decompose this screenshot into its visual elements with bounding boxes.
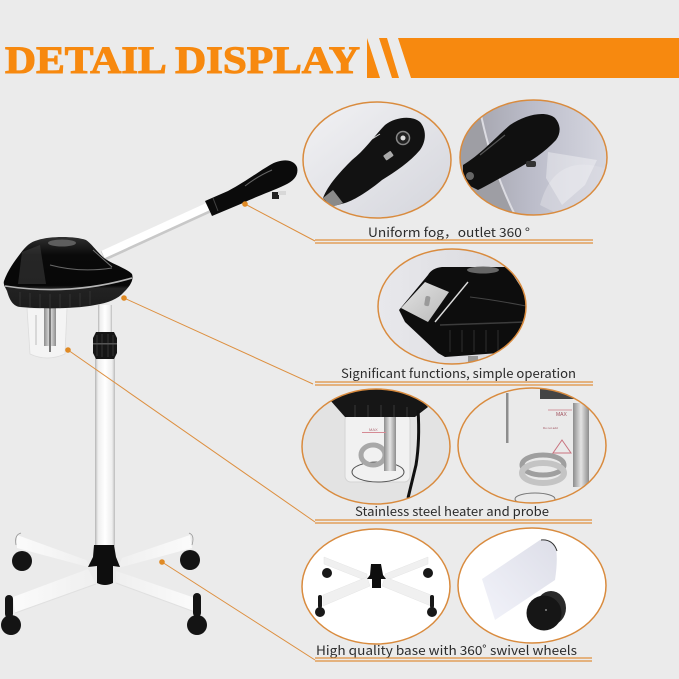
- detail: heater coil close-up: [458, 388, 606, 505]
- detail: rolling base: [302, 529, 450, 644]
- header stripes and bar: [367, 38, 679, 78]
- detail: swivel wheel: [458, 528, 606, 643]
- detail: heater coil close-up: MAX: [556, 412, 568, 418]
- caption underline: heater: [315, 520, 592, 523]
- leader lines and dots: [65, 201, 315, 660]
- detail: control panel close-up: [378, 249, 526, 364]
- caption: functions: Significant functions, simple operation: [341, 363, 576, 382]
- title: DETAIL DISPLAY: [5, 39, 360, 82]
- lower pole: [95, 356, 115, 546]
- caption: fog outlet: Uniform fog，outlet 360 °: [368, 222, 530, 241]
- caption underline: functions: [315, 382, 593, 385]
- caption underline: base and wheels: [315, 658, 592, 661]
- steam arm: [103, 206, 208, 256]
- header: [5, 38, 679, 82]
- detail: heater coil close-up: Do not add: [543, 426, 558, 430]
- caption: base and wheels: High quality base with 360˚ swivel wheels: [316, 640, 577, 659]
- detail: heater in cup: MAX: [369, 427, 378, 432]
- caster wheels: [1, 533, 207, 635]
- water cup: [27, 308, 67, 358]
- base hub: [88, 545, 120, 585]
- nozzle handle: [205, 160, 297, 216]
- detail: heater in cup: [302, 389, 450, 504]
- height adjust grip: [93, 332, 117, 359]
- caption underline: fog outlet: [315, 240, 593, 243]
- product: facial steamer on stand: [1, 160, 297, 635]
- detail: nozzle outlet close-up: [303, 102, 451, 218]
- detail: nozzle spraying mist: [460, 100, 610, 215]
- base arms: [13, 535, 195, 613]
- upper pole: [98, 305, 112, 335]
- caption: heater: Stainless steel heater and probe: [355, 501, 549, 520]
- steamer head: [4, 237, 133, 310]
